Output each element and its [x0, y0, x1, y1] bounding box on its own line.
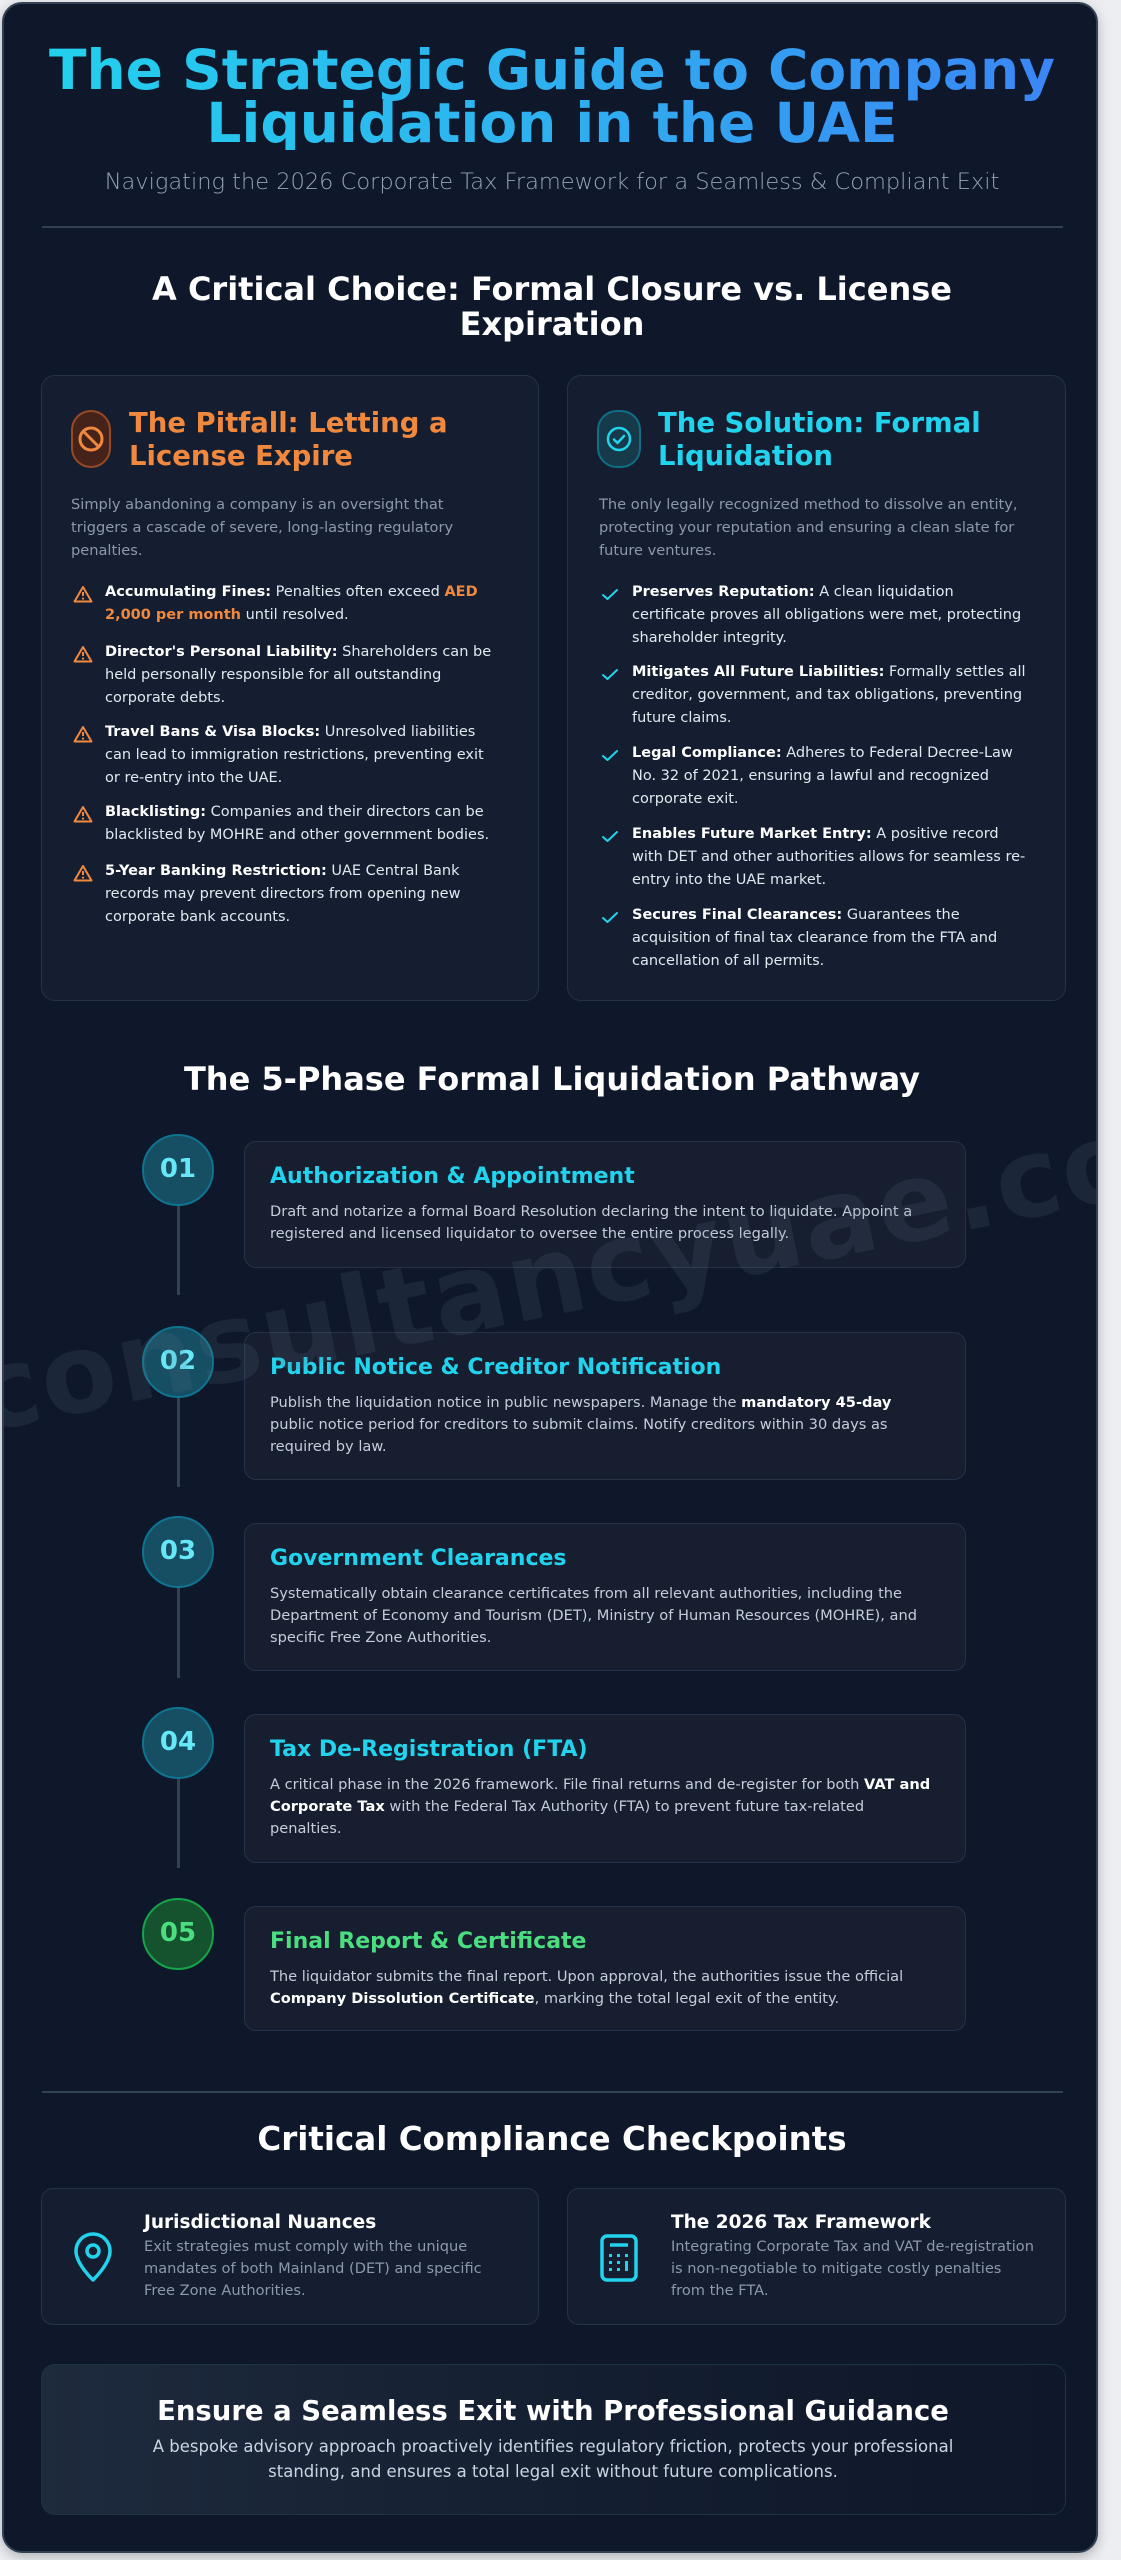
step 4 card: Tax De-Registration (FTA) [270, 1737, 588, 1762]
body: Integrating Corporate Tax and VAT de-registration [671, 2238, 1034, 2255]
bullet: reputation: shareholder integrity. [632, 630, 787, 646]
step 2 card: public notice period for creditors to submit claims. Notify creditors within 30 days as [270, 1416, 888, 1433]
step 3 card: Systematically obtain clearance certificates from all relevant authorities, including the [270, 1585, 902, 1602]
icon: check circle [597, 410, 641, 468]
step 1 circle [142, 1134, 214, 1206]
step 3 circle: 03 [160, 1536, 196, 1566]
subtitle: Navigating the 2026 Corporate Tax Framework for a Seamless & Compliant Exit [105, 169, 999, 195]
heading: The Pitfall: Letting a [129, 407, 448, 439]
heading: Jurisdictional Nuances [144, 2212, 376, 2233]
step 3 card: Government Clearances [270, 1546, 566, 1571]
step 1 card: Authorization & Appointment [270, 1164, 635, 1189]
heading: License Expire [129, 440, 353, 472]
step 4 card: penalties. [270, 1820, 342, 1837]
bullet: clearances [602, 907, 997, 969]
step 2 circle: 02 [160, 1346, 196, 1376]
callout body [152, 2437, 953, 2481]
bullet: clearances: acquisition of final tax clearance from the FTA and [632, 930, 997, 946]
body: is non-negotiable to mitigate costly penalties [671, 2260, 1001, 2277]
step 1 card [244, 1141, 966, 1268]
bullet: banking: records may prevent directors from opening new [105, 886, 460, 902]
bullet list: benefits [602, 584, 1026, 969]
description: The only legally recognized method to dissolve an entity, [599, 496, 1018, 513]
step 3 card: specific Free Zone Authorities. [270, 1629, 491, 1646]
step 5 card: Final Report & Certificate [270, 1929, 586, 1954]
bullet: blacklisting [74, 804, 489, 843]
bullet: banking: corporate bank accounts. [105, 909, 290, 925]
heading: The Solution: Formal [658, 407, 981, 439]
step 3 card [244, 1523, 966, 1671]
bullet: clearances: Secures Final Clearances: Guarantees the [632, 907, 960, 923]
bullet: legal [602, 745, 1013, 807]
step 1 card: Draft and notarize a formal Board Resolution declaring the intent to liquidate. Appoint a [270, 1203, 912, 1220]
section heading: checkpoints: Critical Compliance Checkpoints [257, 2120, 847, 2158]
body: mandates of both Mainland (DET) and specific [144, 2260, 482, 2277]
bullet: clearances: cancellation of all permits. [632, 953, 824, 969]
section heading: critical choice: A Critical Choice: Formal Closure vs. License [152, 270, 952, 308]
bullet: market entry: entry into the UAE market. [632, 872, 826, 888]
step 4 circle [142, 1707, 214, 1779]
body [671, 2238, 1034, 2299]
checkpoint: jurisdiction [41, 2188, 539, 2325]
section heading: critical choice [152, 270, 952, 343]
title: The Strategic Guide to Company [49, 38, 1055, 102]
step 5 card [244, 1906, 966, 2031]
step 4 card: A critical phase in the 2026 framework. File final returns and de-register for both VAT and [270, 1776, 930, 1793]
heading [129, 407, 448, 472]
callout: professional guidance [41, 2364, 1066, 2515]
bullet: liabilities [602, 664, 1026, 726]
bullet: travel bans: Travel Bans & Visa Blocks: Unresolved liabilities [105, 724, 475, 740]
icon: prohibited [71, 410, 111, 468]
bullet: fines [74, 584, 478, 623]
step 5 circle [142, 1898, 214, 1970]
description: future ventures. [599, 542, 716, 559]
bullet: banking [74, 863, 460, 925]
title: Liquidation in the UAE [206, 91, 898, 155]
bullet: liability: corporate debts. [105, 690, 225, 706]
step 2 card [244, 1332, 966, 1480]
bullet: market entry: Enables Future Market Entry: A positive record [632, 826, 999, 842]
callout heading: Ensure a Seamless Exit with Professional Guidance [157, 2395, 949, 2427]
section heading: pathway: The 5-Phase Formal Liquidation Pathway [184, 1060, 920, 1098]
heading: The 2026 Tax Framework [671, 2212, 931, 2233]
body: Exit strategies must comply with the unique [144, 2238, 467, 2255]
title [4, 44, 1100, 150]
heading: Liquidation [658, 440, 833, 472]
step 4 card: Corporate Tax with the Federal Tax Authority (FTA) to prevent future tax-related [270, 1798, 864, 1815]
bullet: blacklisting: Blacklisting: Companies and their directors can be [105, 804, 484, 820]
bullet: travel bans: can lead to immigration restrictions, preventing exit [105, 747, 484, 763]
step 1 card: registered and licensed liquidator to oversee the entire process legally. [270, 1225, 789, 1242]
bullet: reputation: certificate proves all obligations were met, protecting [632, 607, 1021, 623]
bullet: market entry: with DET and other authorities allows for seamless re- [632, 849, 1025, 865]
bullet: market entry [602, 826, 1025, 888]
description: triggers a cascade of severe, long-lasting regulatory [71, 519, 453, 536]
step 3 card: Department of Economy and Tourism (DET), Ministry of Human Resources (MOHRE), and [270, 1607, 917, 1624]
step 5 card: Company Dissolution Certificate, marking the total legal exit of the entity. [270, 1990, 839, 2007]
description [598, 496, 1018, 559]
bullet: banking: 5-Year Banking Restriction: UAE Central Bank [105, 863, 460, 879]
bullet: reputation [602, 584, 1021, 646]
panel: solution [567, 375, 1066, 1001]
panel: pitfall [41, 375, 539, 1001]
bullet: reputation: Preserves Reputation: A clean liquidation [632, 584, 954, 600]
bullet: blacklisting: blacklisted by MOHRE and other government bodies. [105, 827, 489, 843]
description: protecting your reputation and ensuring a clean slate for [599, 519, 1014, 536]
bullet list: pitfalls [74, 584, 491, 925]
bullet: fines: 2,000 per month until resolved. [105, 607, 349, 623]
bullet: liability: Director's Personal Liability: Shareholders can be [105, 644, 491, 660]
step 5 card: The liquidator submits the final report. Upon approval, the authorities issue the official [270, 1968, 903, 1985]
step 4 circle: 04 [160, 1727, 196, 1757]
bullet: liabilities: Mitigates All Future Liabilities: Formally settles all [632, 664, 1026, 680]
callout body: A bespoke advisory approach proactively identifies regulatory friction, protects your professional [153, 2437, 953, 2456]
step 2 card: Public Notice & Creditor Notification [270, 1355, 721, 1380]
bullet: legal: corporate exit. [632, 791, 739, 807]
icon: calculator [600, 2234, 638, 2282]
bullet: legal: Legal Compliance: Adheres to Federal Decree-Law [632, 745, 1013, 761]
description [71, 496, 453, 559]
heading [658, 407, 981, 472]
bullet: liability [74, 644, 491, 706]
body: from the FTA. [671, 2282, 768, 2299]
bullet: travel bans: or re-entry into the UAE. [105, 770, 282, 786]
bullet: liability: held personally responsible for all outstanding [105, 667, 441, 683]
step 4 card [244, 1714, 966, 1863]
step 1 circle: 01 [160, 1154, 196, 1184]
step 2 circle [142, 1326, 214, 1398]
description: Simply abandoning a company is an oversight that [71, 496, 444, 513]
checkpoint: tax framework [567, 2188, 1066, 2325]
bullet: fines: Accumulating Fines: Penalties often exceed AED [105, 584, 478, 600]
bullet: liabilities: future claims. [632, 710, 732, 726]
step 2 card: required by law. [270, 1438, 387, 1455]
description: penalties. [71, 542, 142, 559]
bullet: liabilities: creditor, government, and tax obligations, preventing [632, 687, 1022, 703]
body [144, 2238, 482, 2299]
callout body: standing, and ensures a total legal exit without future complications. [268, 2462, 838, 2481]
icon: map pin [74, 2232, 112, 2282]
step 2 card: Publish the liquidation notice in public newspapers. Manage the mandatory 45-day [270, 1394, 891, 1411]
bullet: travel bans [74, 724, 484, 786]
section heading: critical choice: Expiration [460, 305, 644, 343]
body: Free Zone Authorities. [144, 2282, 306, 2299]
step 3 circle [142, 1516, 214, 1588]
step 5 circle: 05 [160, 1918, 196, 1948]
bullet: legal: No. 32 of 2021, ensuring a lawful and recognized [632, 768, 989, 784]
